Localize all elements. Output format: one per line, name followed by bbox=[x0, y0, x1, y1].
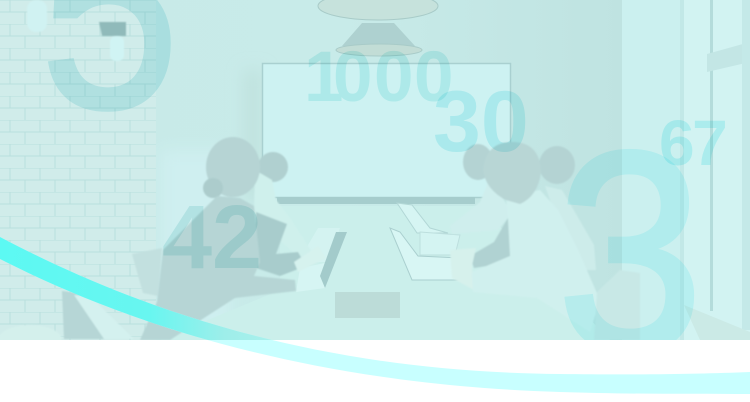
number 30: 30 bbox=[433, 74, 529, 170]
number 1000: 1000 bbox=[304, 38, 454, 117]
chairs on left bbox=[0, 248, 162, 340]
laptops and papers bbox=[296, 203, 460, 292]
people on right bbox=[450, 142, 640, 340]
table bbox=[483, 230, 594, 340]
number 42: 42 bbox=[162, 188, 262, 288]
ceiling lamps bbox=[318, 0, 438, 56]
sign on table bbox=[335, 292, 400, 318]
people on left bbox=[140, 137, 326, 340]
right pillar bbox=[622, 0, 682, 340]
ribbon base on white bbox=[0, 237, 750, 394]
curved ribbon bbox=[0, 237, 750, 394]
window bbox=[680, 0, 750, 340]
light lower wall and shadow beside the screen bbox=[179, 86, 254, 170]
presentation screen bbox=[262, 64, 510, 204]
background wall bbox=[156, 0, 622, 340]
wall lamp bbox=[27, 0, 126, 61]
ribbon over photo bbox=[0, 237, 272, 340]
brick wall bbox=[0, 0, 156, 340]
number 67: 67 bbox=[659, 107, 725, 179]
